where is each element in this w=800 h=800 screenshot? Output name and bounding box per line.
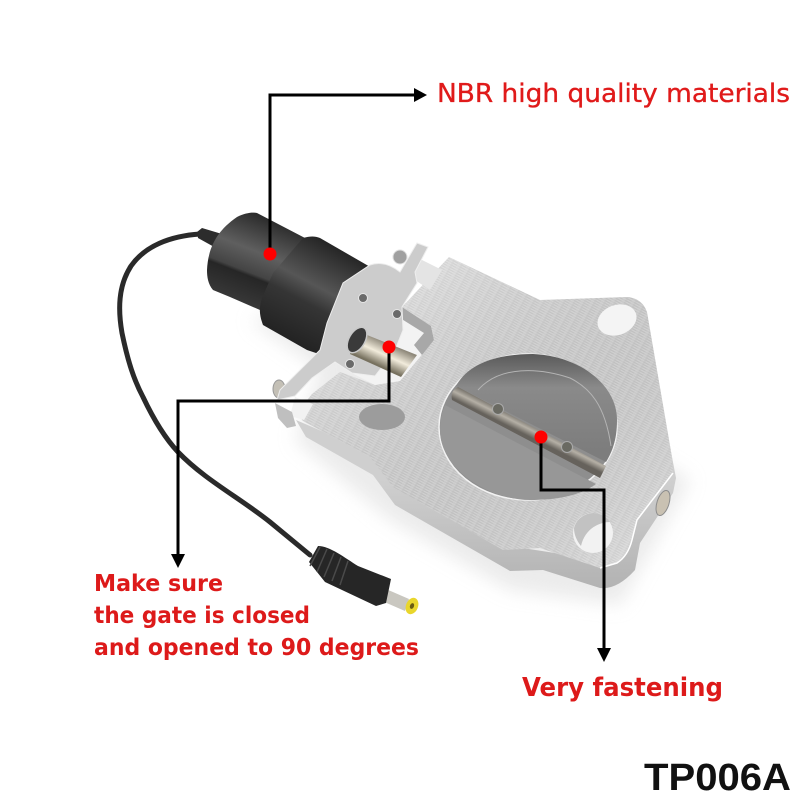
top mounting hole bbox=[593, 299, 641, 341]
marker bbox=[264, 248, 276, 260]
gate screws bbox=[492, 404, 504, 414]
gate shaft bbox=[452, 387, 606, 478]
label: Make sure bbox=[94, 571, 223, 597]
connector plug bbox=[309, 546, 421, 616]
product photo: exhaust cutout valve bbox=[120, 213, 676, 616]
label: the gate is closed bbox=[94, 603, 310, 629]
motor rubber boot bbox=[207, 213, 372, 355]
stand-off bottom bbox=[273, 380, 285, 398]
label bbox=[94, 571, 419, 661]
bracket plate bbox=[277, 243, 428, 400]
plate top face bbox=[297, 257, 673, 568]
cable bbox=[120, 234, 310, 555]
model number: TP006A bbox=[644, 757, 791, 799]
bottom mounting hole bbox=[573, 513, 613, 553]
window behind bracket bbox=[350, 307, 434, 385]
stand-off top bbox=[393, 250, 407, 264]
callout: gate bbox=[94, 340, 419, 661]
arrow head bbox=[597, 648, 611, 662]
label: Very fastening bbox=[522, 673, 723, 703]
slot hole bbox=[359, 404, 405, 430]
arrow head bbox=[171, 554, 185, 568]
product shadow bbox=[250, 300, 690, 605]
bottom spacer bbox=[290, 397, 313, 420]
piston shaft bbox=[350, 331, 417, 377]
bracket screws bbox=[358, 294, 368, 302]
bearing bbox=[343, 324, 371, 356]
leader line bbox=[178, 347, 389, 556]
connector tip bbox=[382, 589, 409, 611]
plate side wall bbox=[296, 420, 676, 588]
marker bbox=[534, 430, 548, 444]
callout: NBR materials bbox=[264, 79, 790, 260]
gate upper half bbox=[456, 354, 617, 462]
leader line bbox=[270, 95, 416, 254]
label: NBR high quality materials bbox=[437, 79, 790, 109]
bracket with stand-offs bbox=[273, 243, 442, 428]
leader line bbox=[541, 437, 604, 650]
arrow head bbox=[414, 88, 427, 102]
gate opening bbox=[439, 354, 617, 500]
plate edge highlight bbox=[600, 473, 673, 568]
top spacer bbox=[412, 258, 442, 290]
cable strain relief bbox=[197, 228, 222, 248]
marker bbox=[382, 340, 396, 354]
plate side bolt bbox=[653, 489, 673, 517]
callout: fastening bbox=[522, 430, 723, 703]
gate lower half bbox=[440, 405, 596, 500]
connector grip bbox=[309, 546, 391, 606]
label: and opened to 90 degrees bbox=[94, 635, 419, 661]
